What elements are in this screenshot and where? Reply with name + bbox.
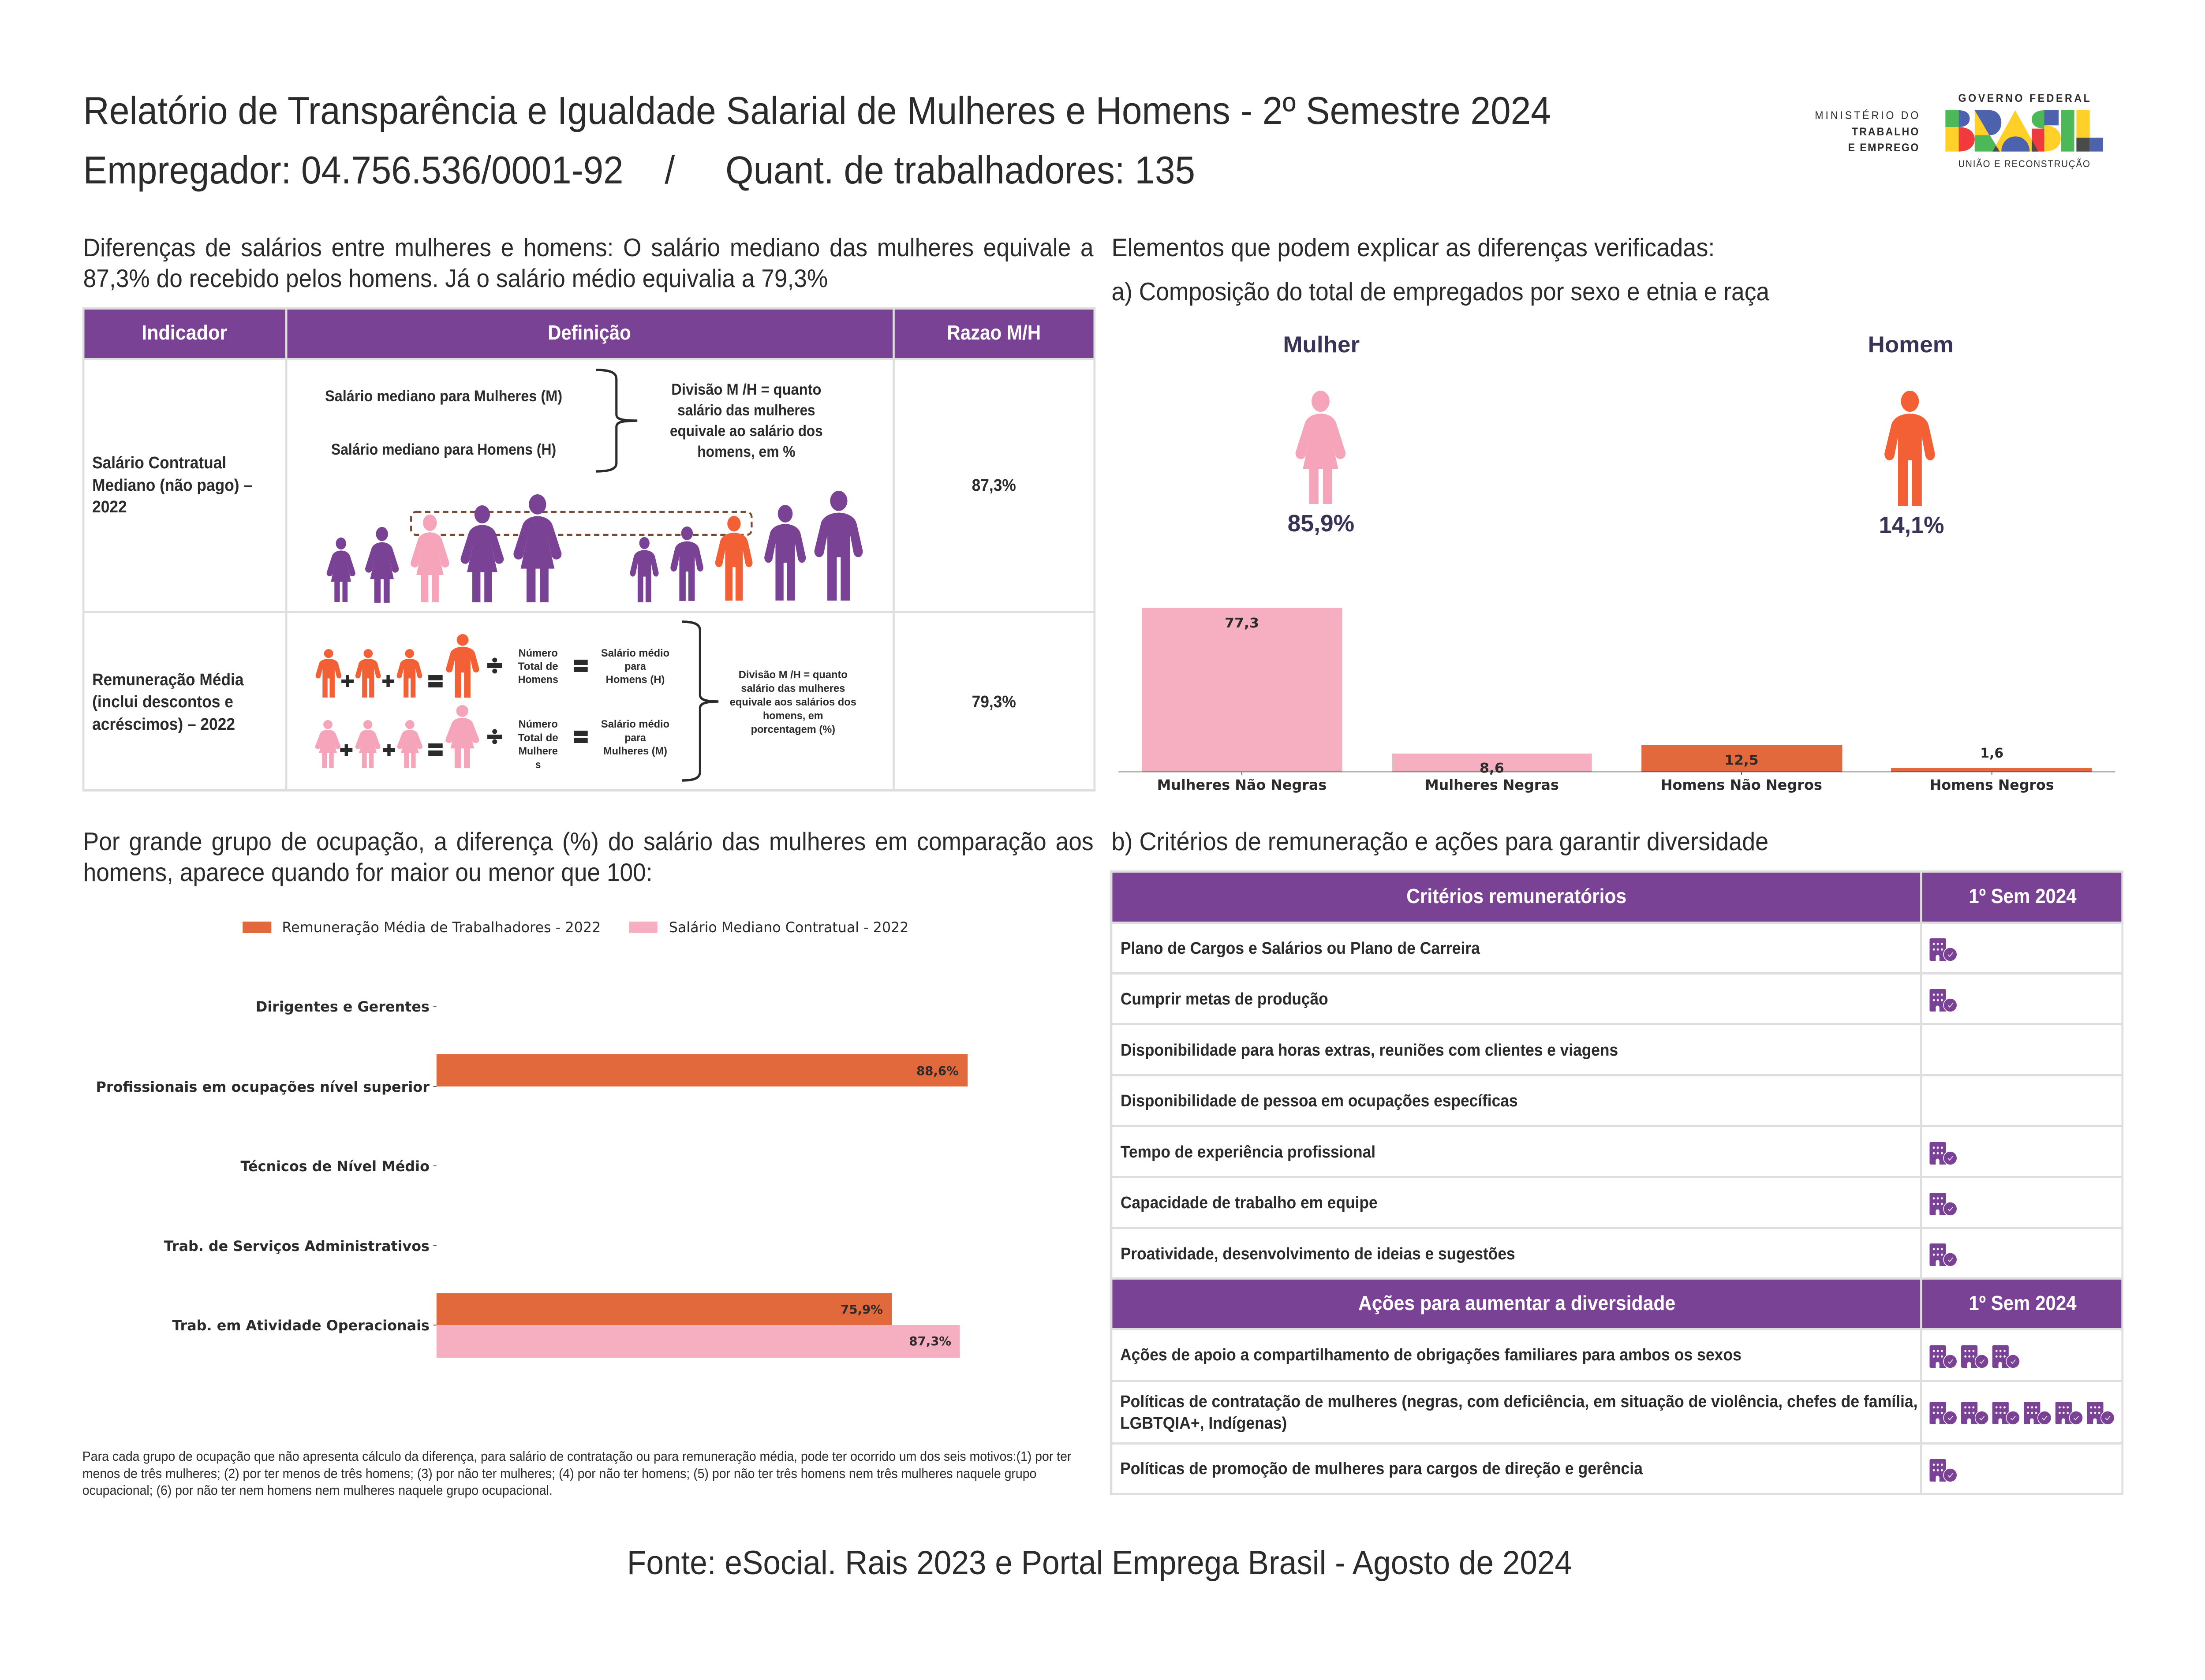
heading: critérios de remuneração: b) Critérios de remuneração e ações para garantir diversidade bbox=[1111, 827, 1768, 855]
value: mulheres negras: 8,6 bbox=[1480, 760, 1504, 776]
legend: Remuneração Média de Trabalhadores - 2022 bbox=[282, 919, 601, 936]
text: divisão mediano bbox=[670, 381, 823, 460]
row: políticas de contratação: Políticas de contratação de mulheres (negras, com deficiência, em situação de violência, chefes de família, bbox=[1120, 1392, 1918, 1411]
bar: operacionais salário mediano: 87,3% bbox=[909, 1334, 951, 1348]
header: critérios remuneratórios bbox=[1406, 885, 2077, 907]
header: critérios remuneratórios: Critérios remuneratórios bbox=[1406, 885, 1626, 907]
icons: fórmula homens bbox=[316, 634, 588, 698]
row label: salário contratual mediano: Salário Contratual bbox=[92, 453, 226, 472]
text: divisão mediano: homens, em % bbox=[697, 443, 795, 460]
row label: salário contratual mediano: 2022 bbox=[92, 497, 127, 516]
bar: homens negros: Homens Negros bbox=[1930, 777, 2054, 793]
category labels: Trab. de Serviços Administrativos bbox=[164, 1238, 430, 1254]
logo: ministério e governo federal: MINISTÉRIO DO bbox=[1815, 109, 1918, 122]
row: cumprir metas bbox=[1121, 989, 1957, 1012]
bar: mulheres negras bbox=[1392, 754, 1592, 793]
row: políticas de contratação bbox=[1120, 1392, 2115, 1432]
header: colunas: Indicador bbox=[142, 322, 227, 344]
row label: remuneração média: Remuneração Média bbox=[92, 670, 244, 689]
row label: salário contratual mediano: Mediano (não pago) – bbox=[92, 476, 252, 494]
bar: operacionais remuneração média bbox=[437, 1293, 892, 1325]
text: número total de mulheres: Total de bbox=[518, 732, 558, 743]
row: disponibilidade horas extras: Disponibilidade para horas extras, reuniões com clientes e viagens bbox=[1121, 1041, 1618, 1059]
brace: remuneração média bbox=[682, 622, 718, 780]
row: ações de apoio: Ações de apoio a compartilhamento de obrigações familiares para ambos os sexos bbox=[1120, 1345, 1742, 1364]
text: salário médio para homens: Salário médio bbox=[601, 647, 669, 659]
header: ações para diversidade: Ações para aumentar a diversidade bbox=[1358, 1292, 1675, 1314]
text: número total de homens: Total de bbox=[518, 660, 558, 672]
bar: mulheres não negras: 77,3 bbox=[1225, 615, 1259, 631]
column chart: composição por sexo e raça bbox=[1118, 608, 2115, 793]
panel: mulher bbox=[1283, 332, 1360, 537]
bar: mulheres não negras bbox=[1142, 608, 1342, 793]
text: divisão média: Divisão M /H = quanto bbox=[739, 668, 848, 680]
text block: por grande grupo de ocupação bbox=[83, 827, 1094, 886]
value: razão salário mediano: 87,3% bbox=[972, 476, 1016, 494]
legend: Salário Mediano Contratual - 2022 bbox=[669, 919, 908, 936]
icons: fórmula mulheres bbox=[315, 705, 588, 768]
text: divisão média: equivale aos salários dos bbox=[730, 696, 856, 708]
text: salário médio para mulheres: Salário médio bbox=[601, 718, 669, 730]
bar: homens não negros: Homens Não Negros bbox=[1661, 777, 1822, 793]
row: plano de cargos bbox=[1121, 938, 1957, 961]
panel: mulher: 85,9% bbox=[1288, 510, 1354, 537]
row: políticas de contratação: LGBTQIA+, Indígenas) bbox=[1120, 1414, 1287, 1432]
row label: salário contratual mediano bbox=[92, 453, 252, 516]
text: salário médio para homens: Homens (H) bbox=[606, 673, 665, 685]
bar chart: diferença por grupo de ocupação bbox=[96, 919, 968, 1358]
header: critérios remuneratórios: 1º Sem 2024 bbox=[1969, 885, 2077, 907]
panel: mulher: Mulher bbox=[1283, 332, 1360, 357]
category labels: Trab. em Atividade Operacionais bbox=[172, 1318, 430, 1334]
text: divisão mediano: salário das mulheres bbox=[677, 402, 815, 419]
footnote: Para cada grupo de ocupação que não apresenta cálculo da diferença, para salário de contratação ou para remuneração média, pode ter ocorrido um dos seis motivos:(1) por ter bbox=[82, 1449, 1072, 1464]
text: número total de homens bbox=[518, 647, 558, 685]
row: disponibilidade ocupações: Disponibilidade de pessoa em ocupações específicas bbox=[1121, 1091, 1518, 1110]
bar: mulheres negras: Mulheres Negras bbox=[1425, 777, 1559, 793]
text: número total de homens: Número bbox=[519, 647, 558, 659]
row: tempo de experiência: Tempo de experiência profissional bbox=[1121, 1142, 1375, 1161]
bar: profissionais remuneração média: 88,6% bbox=[916, 1064, 959, 1078]
text: salário médio para mulheres: Mulheres (M) bbox=[603, 745, 667, 757]
text: número total de mulheres bbox=[518, 718, 558, 770]
icons: fila de homens bbox=[630, 491, 863, 602]
text: número total de mulheres: Número bbox=[519, 718, 558, 730]
row: capacidade de trabalho bbox=[1121, 1193, 1957, 1216]
header: ações para diversidade bbox=[1358, 1292, 2077, 1314]
text block: diferenças de salários: Diferenças de salários entre mulheres e homens: O salário mediano das mulheres equivale a bbox=[83, 233, 1094, 261]
logo: ministério e governo federal: E EMPREGO bbox=[1848, 142, 1918, 154]
title: Relatório de Transparência e Igualdade Salarial de Mulheres e Homens - 2º Semestre 2024 bbox=[83, 89, 1551, 132]
bar: operacionais remuneração média: 75,9% bbox=[841, 1303, 883, 1317]
footnote: ocupacional; (6) por não ter nem homens nem mulheres naquele grupo ocupacional. bbox=[82, 1483, 553, 1498]
row: ações de apoio bbox=[1120, 1345, 2020, 1368]
definition labels: salário mediano: Salário mediano para Homens (H) bbox=[331, 441, 556, 458]
row label: remuneração média: (inclui descontos e bbox=[92, 692, 233, 711]
title: / bbox=[665, 148, 675, 192]
text: divisão mediano: Divisão M /H = quanto bbox=[671, 381, 821, 398]
text block: por grande grupo de ocupação: homens, aparece quando for maior ou menor que 100: bbox=[83, 858, 653, 886]
text: número total de mulheres: Mulhere bbox=[519, 745, 558, 757]
bar: profissionais remuneração média bbox=[437, 1054, 968, 1086]
panel: homem bbox=[1868, 332, 1954, 538]
panel: homem: Homem bbox=[1868, 332, 1954, 357]
row: políticas de promoção bbox=[1120, 1459, 1957, 1482]
header: colunas: Razao M/H bbox=[947, 322, 1041, 344]
title: Quant. de trabalhadores: 135 bbox=[725, 148, 1195, 192]
text: divisão mediano: equivale ao salário dos bbox=[670, 422, 823, 440]
text block: diferenças de salários bbox=[83, 233, 1094, 292]
icons: fila de mulheres bbox=[327, 494, 561, 603]
bar: homens negros bbox=[1891, 745, 2092, 793]
icon: mulher bbox=[1296, 391, 1345, 504]
panel: tabela de indicadores bbox=[82, 307, 1095, 791]
row label: remuneração média bbox=[92, 670, 244, 733]
icon: homem bbox=[1884, 391, 1935, 506]
row: plano de cargos: Plano de Cargos e Salários ou Plano de Carreira bbox=[1121, 939, 1480, 957]
row: políticas de promoção: Políticas de promoção de mulheres para cargos de direção e gerência bbox=[1120, 1459, 1643, 1478]
logo: ministério e governo federal bbox=[1815, 92, 2103, 169]
title: Empregador: 04.756.536/0001-92 bbox=[83, 148, 624, 192]
panel: homem: 14,1% bbox=[1879, 512, 1944, 538]
row: proatividade: Proatividade, desenvolvimento de ideias e sugestões bbox=[1121, 1244, 1515, 1263]
text block: por grande grupo de ocupação: Por grande grupo de ocupação, a diferença (%) do salário das mulheres em comparação aos bbox=[83, 827, 1094, 855]
text: salário médio para homens: para bbox=[624, 660, 647, 672]
text: número total de homens: Homens bbox=[518, 673, 558, 685]
bar: homens não negros bbox=[1641, 745, 1842, 793]
text: salário médio para homens bbox=[601, 647, 669, 685]
legend bbox=[243, 919, 908, 936]
header: ações para diversidade: 1º Sem 2024 bbox=[1969, 1292, 2077, 1314]
row: proatividade bbox=[1121, 1243, 1957, 1266]
category labels bbox=[96, 999, 437, 1334]
panel: tabela de critérios e ações bbox=[1110, 870, 2123, 1495]
text: salário médio para mulheres bbox=[601, 718, 669, 757]
logo: ministério e governo federal: GOVERNO FEDERAL bbox=[1958, 92, 2090, 105]
row: cumprir metas: Cumprir metas de produção bbox=[1121, 989, 1328, 1008]
logo: ministério e governo federal: TRABALHO bbox=[1852, 126, 1918, 138]
header: colunas bbox=[142, 322, 1041, 344]
bar: operacionais salário mediano bbox=[437, 1325, 960, 1358]
source line: Fonte: eSocial. Rais 2023 e Portal Emprega Brasil - Agosto de 2024 bbox=[627, 1544, 1572, 1582]
text block: diferenças de salários: 87,3% do recebido pelos homens. Já o salário médio equivalia a 79,3% bbox=[83, 264, 828, 292]
category labels: Profissionais em ocupações nível superior bbox=[96, 1079, 430, 1095]
row: capacidade de trabalho: Capacidade de trabalho em equipe bbox=[1121, 1193, 1378, 1212]
dashed highlight box bbox=[411, 512, 751, 535]
header: colunas: Definição bbox=[548, 322, 631, 344]
bar: homens negros: 1,6 bbox=[1980, 745, 2003, 761]
title bbox=[83, 89, 1551, 192]
category labels: Técnicos de Nível Médio bbox=[241, 1158, 430, 1175]
logo: ministério e governo federal: UNIÃO E RECONSTRUÇÃO bbox=[1958, 158, 2090, 169]
row label: remuneração média: acréscimos) – 2022 bbox=[92, 715, 235, 733]
text: divisão média: porcentagem (%) bbox=[751, 723, 835, 735]
bar: homens não negros: 12,5 bbox=[1724, 752, 1758, 768]
text: número total de mulheres: s bbox=[535, 758, 541, 770]
heading: elementos que podem explicar: Elementos que podem explicar as diferenças verificadas: bbox=[1111, 233, 1715, 261]
text: divisão média: salário das mulheres bbox=[741, 682, 845, 694]
footnote bbox=[82, 1449, 1072, 1498]
footnote: menos de três mulheres; (2) por ter menos de três homens; (3) por não ter mulheres; (4) por não ter homens; (5) por não ter três homens nem três mulheres naquele grupo bbox=[82, 1466, 1036, 1481]
heading: composição do total: a) Composição do total de empregados por sexo e etnia e raça bbox=[1111, 277, 1769, 306]
text: divisão média: homens, em bbox=[763, 709, 823, 721]
definition labels: salário mediano: Salário mediano para Mulheres (M) bbox=[325, 388, 562, 405]
text: divisão média bbox=[730, 668, 856, 735]
row: tempo de experiência bbox=[1121, 1142, 1957, 1165]
value: razão remuneração média: 79,3% bbox=[972, 692, 1016, 711]
bar: mulheres não negras: Mulheres Não Negras bbox=[1157, 777, 1327, 793]
definition labels: salário mediano bbox=[325, 388, 562, 458]
brace: salário mediano bbox=[596, 370, 637, 471]
text: salário médio para mulheres: para bbox=[624, 732, 647, 743]
category labels: Dirigentes e Gerentes bbox=[256, 999, 430, 1015]
